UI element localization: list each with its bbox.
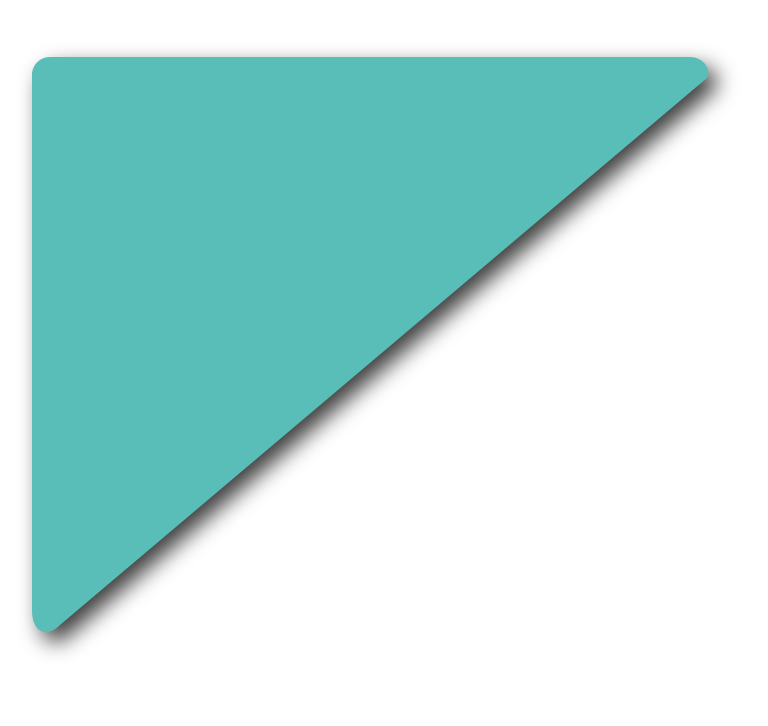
shadow: triangle drop shadow (41, 67, 717, 642)
panel: teal rounded triangle (32, 57, 708, 632)
